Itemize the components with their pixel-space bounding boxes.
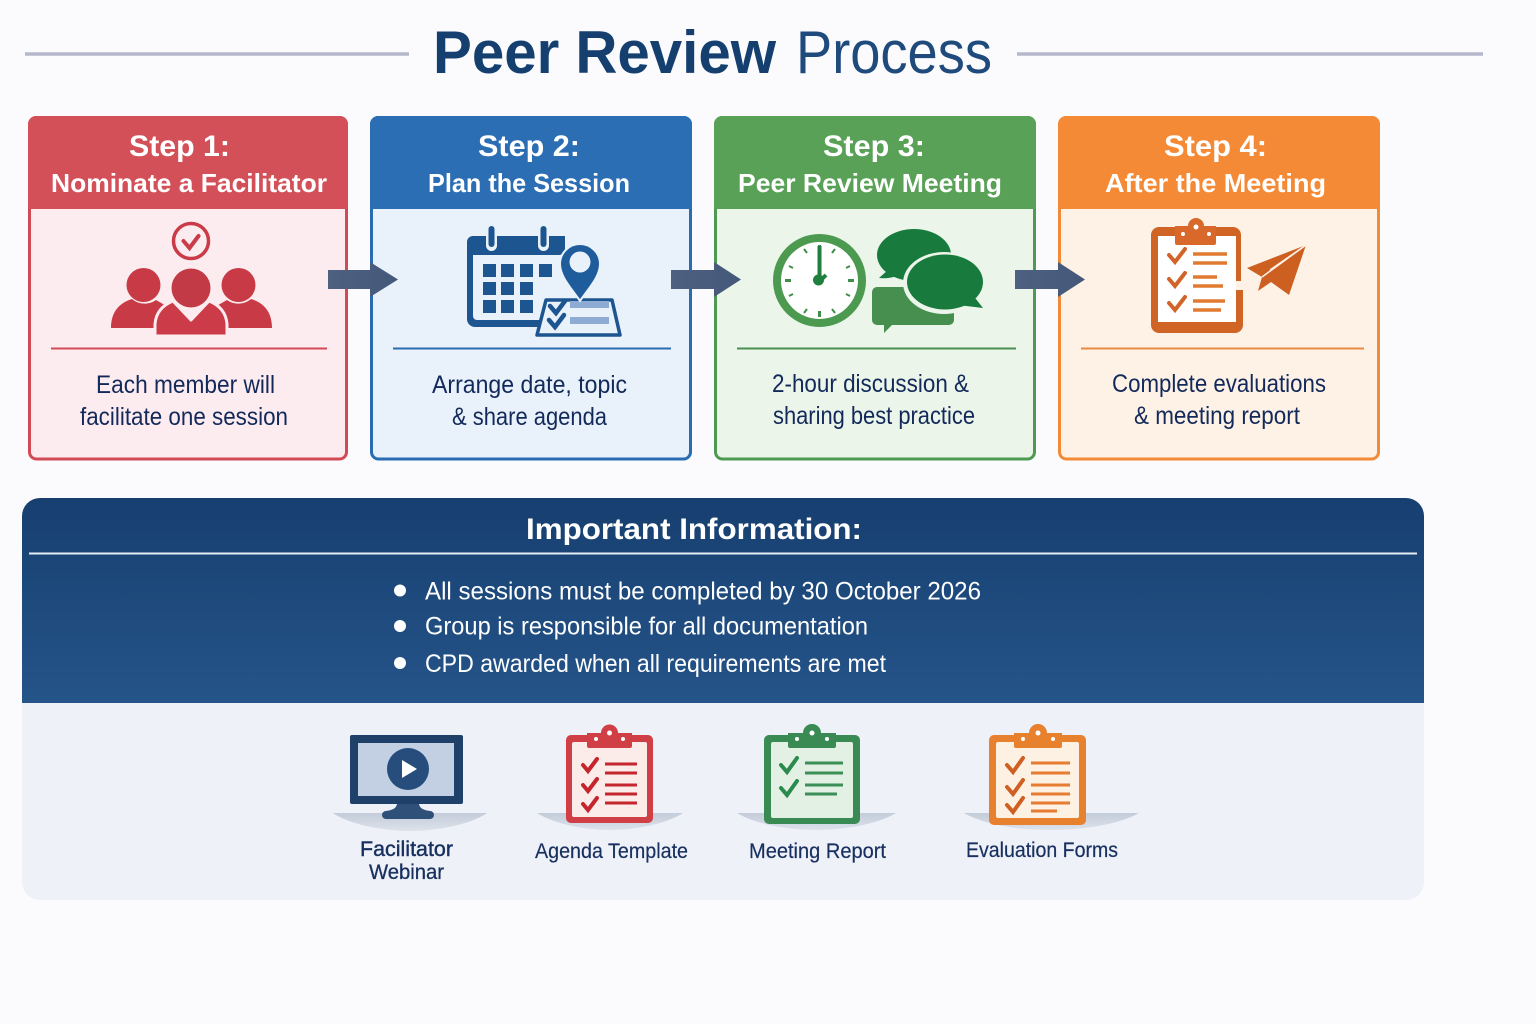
step 1 description: Each member will: [96, 371, 275, 399]
panel: step 1: [28, 116, 348, 459]
arrow: step 2 to step 3: [671, 262, 741, 297]
step 1 description: [80, 371, 288, 431]
title: [25, 19, 1483, 86]
icon: team with check: [111, 224, 272, 336]
step 1 heading: Nominate a Facilitator: [51, 168, 327, 198]
icon: clock and speech bubbles: [777, 229, 985, 333]
panel: step 2: [370, 116, 692, 459]
panel: important information: [22, 498, 1424, 900]
step 4 heading: [1105, 130, 1326, 198]
resource: agenda template: [535, 725, 688, 863]
step 4 heading: After the Meeting: [1105, 168, 1326, 198]
resource: facilitator webinar: [333, 735, 487, 884]
step 1 heading: [51, 130, 327, 198]
panel: step 4: [1058, 116, 1380, 459]
step 4 description: [1112, 370, 1326, 430]
resource: facilitator webinar: Webinar: [369, 861, 444, 884]
step 3 heading: Step 3:: [823, 130, 925, 163]
step 2 description: [432, 371, 627, 431]
resource: evaluation forms: Evaluation Forms: [966, 838, 1118, 862]
information heading: Important Information:: [526, 513, 862, 546]
step 4 heading: Step 4:: [1164, 130, 1267, 163]
resource: meeting report: [737, 724, 896, 863]
step 2 description: Arrange date, topic: [432, 371, 627, 399]
title: Process: [796, 19, 992, 86]
step 3 description: 2-hour discussion &: [772, 370, 969, 398]
resource: agenda template: Agenda Template: [535, 839, 688, 863]
step 3 description: [772, 370, 975, 430]
icon: checklist and paper plane: [1151, 218, 1306, 333]
information bullet list: All sessions must be completed by 30 October 2026: [425, 578, 981, 606]
step 2 heading: Plan the Session: [428, 168, 630, 198]
information bullet list: Group is responsible for all documentation: [425, 612, 868, 640]
resource: evaluation forms: [964, 724, 1139, 862]
step 4 description: & meeting report: [1134, 402, 1300, 430]
step 3 heading: Peer Review Meeting: [738, 168, 1002, 198]
resource: meeting report: Meeting Report: [749, 839, 886, 863]
title: Peer Review: [433, 19, 776, 86]
step 2 description: & share agenda: [452, 403, 607, 431]
step 4 description: Complete evaluations: [1112, 370, 1326, 398]
icon: calendar with pin and checklist: [467, 226, 620, 335]
resource: facilitator webinar: Facilitator: [360, 838, 453, 861]
arrow: step 1 to step 2: [328, 262, 398, 297]
step 2 heading: Step 2:: [478, 130, 580, 163]
step 3 description: sharing best practice: [773, 402, 975, 430]
arrow: step 3 to step 4: [1015, 262, 1085, 297]
step 2 heading: [428, 130, 630, 198]
step 1 description: facilitate one session: [80, 403, 288, 431]
information bullet list: [394, 578, 981, 678]
information bullet list: CPD awarded when all requirements are met: [425, 650, 886, 678]
panel: step 3: [714, 116, 1036, 459]
step 1 heading: Step 1:: [129, 130, 230, 163]
step 3 heading: [738, 130, 1002, 198]
